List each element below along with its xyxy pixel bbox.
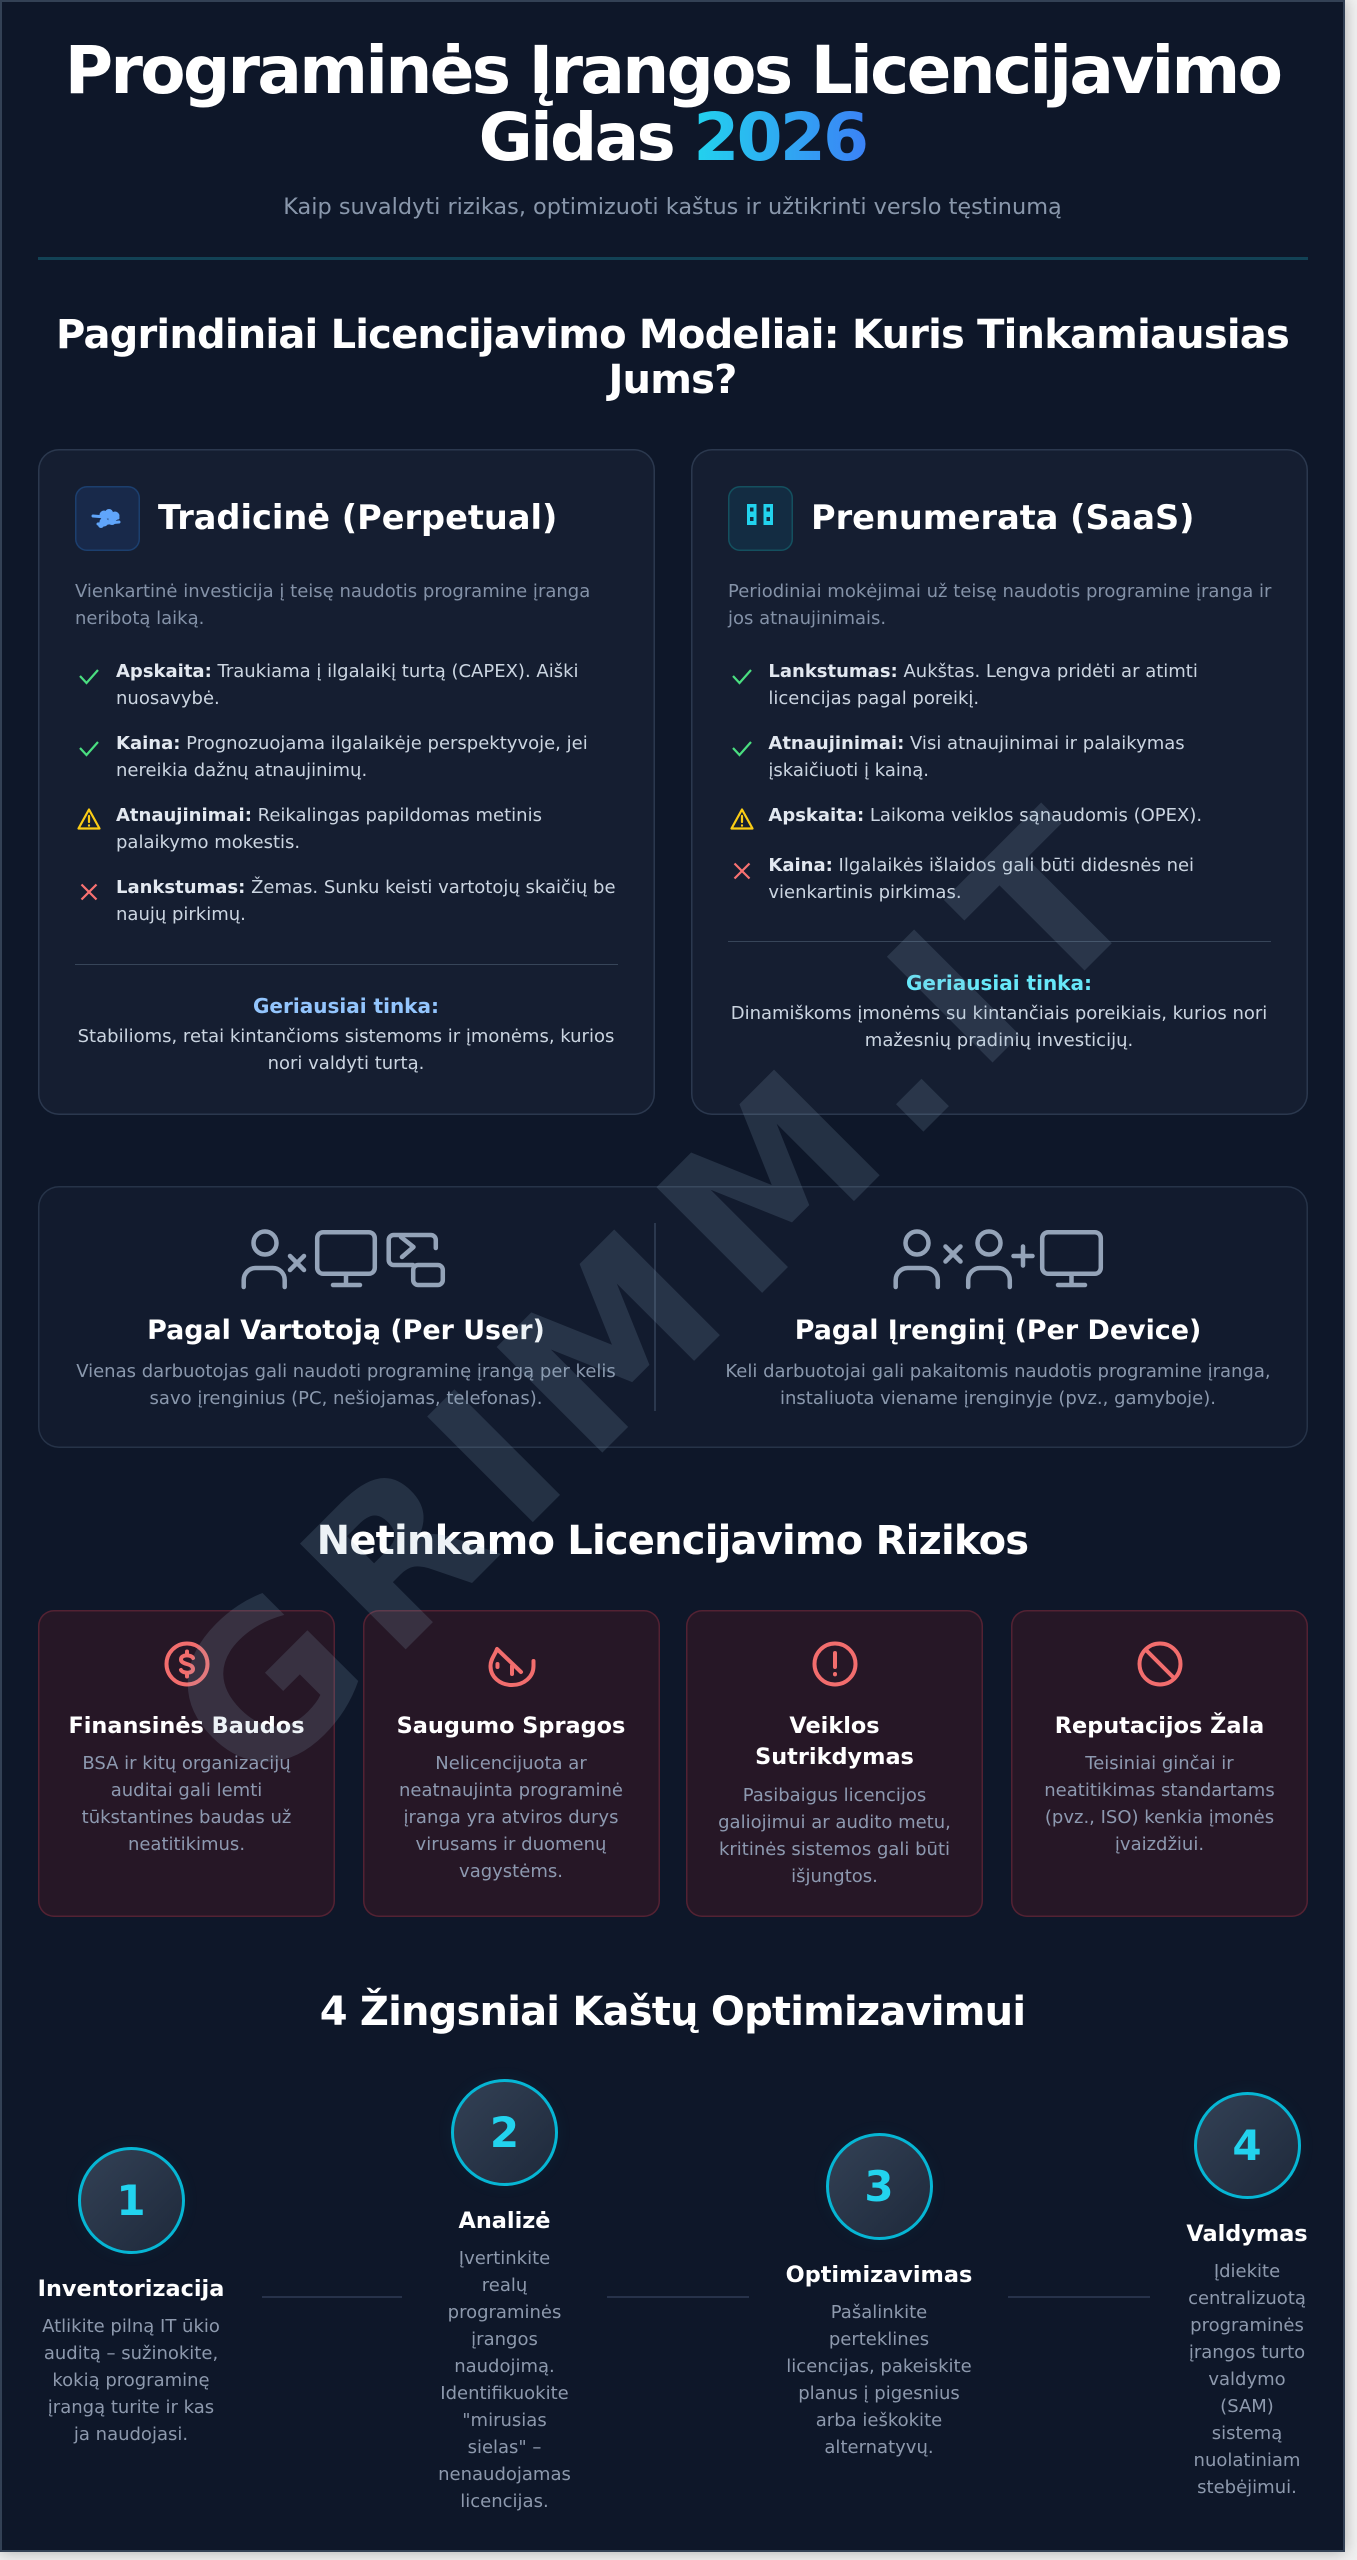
heading: subscription: Prenumerata (SaaS)	[811, 498, 1195, 537]
text: security: virusams ir duomenų	[416, 1834, 606, 1855]
best for label: Geriausiai tinka:	[253, 994, 439, 1018]
text: fines: auditai gali lemti	[111, 1780, 262, 1801]
icon: warning	[730, 808, 754, 830]
step text: stebėjimui.	[1197, 2477, 1297, 2498]
text: per user	[76, 1361, 616, 1409]
list item: accounting: Apskaita: Traukiama į ilgalaikį turtą (CAPEX). Aiški	[116, 661, 578, 682]
list item: renewals: palaikymo mokestis.	[116, 832, 300, 853]
heading: risks: Netinkamo Licencijavimo Rizikos	[317, 1518, 1028, 1564]
text: reputation	[1044, 1753, 1275, 1855]
list item: flexibility	[116, 876, 616, 925]
step text: Pašalinkite	[831, 2302, 927, 2323]
step text: Įvertinkite	[459, 2248, 550, 2269]
description: subscription: jos atnaujinimais.	[728, 608, 886, 629]
icon: perpetual	[75, 486, 140, 551]
step text: sistemą	[1212, 2423, 1282, 2444]
step text: realų	[482, 2275, 527, 2296]
step text: ja naudojasi.	[74, 2424, 188, 2445]
best for text	[731, 1003, 1267, 1051]
description: subscription: Periodiniai mokėjimai už teisę naudotis programine įranga ir	[728, 581, 1271, 602]
text: disruption	[718, 1785, 951, 1887]
step text: įrangos turto	[1189, 2342, 1305, 2363]
icon: cross	[734, 862, 750, 880]
heading: reputation: Reputacijos Žala	[1055, 1713, 1264, 1739]
list item: renewals: Atnaujinimai: Reikalingas papildomas metinis	[116, 805, 542, 826]
step number 2	[451, 2079, 558, 2186]
description: perpetual: Vienkartinė investicija į teisę naudotis programine įranga	[75, 581, 590, 602]
text: fines	[82, 1753, 291, 1855]
step 3	[786, 2133, 972, 2458]
list item: price: Kaina: Prognozuojama ilgalaikėje perspektyvoje, jei	[116, 733, 588, 754]
step text: (SAM)	[1220, 2396, 1274, 2417]
list item: accounting	[116, 661, 578, 709]
icon: check	[79, 741, 99, 756]
description: perpetual	[75, 581, 590, 629]
heading: disruption: Veiklos	[789, 1713, 880, 1739]
list item: flexibility	[768, 661, 1198, 709]
step number 2: 2	[490, 2108, 519, 2157]
list item: renewals	[116, 805, 542, 853]
description: perpetual: neribotą laiką.	[75, 608, 204, 629]
step text: auditą – sužinokite,	[44, 2343, 218, 2364]
description: subscription	[728, 581, 1272, 629]
text: per user: Vienas darbuotojas gali naudoti programinę įrangą per kelis	[76, 1361, 616, 1382]
step title: Analizė	[459, 2208, 550, 2234]
step number 1: 1	[116, 2176, 146, 2225]
step number 3: 3	[864, 2162, 894, 2211]
heading: per user: Pagal Vartotoją (Per User)	[147, 1315, 545, 1346]
text: per device	[725, 1361, 1271, 1409]
list item: price: vienkartinis pirkimas.	[768, 882, 962, 903]
list item: price	[768, 855, 1194, 903]
step 2	[438, 2079, 571, 2512]
text: security: Nelicencijuota ar	[435, 1753, 587, 1774]
best for text	[78, 1026, 614, 1074]
heading: four steps: 4 Žingsniai Kaštų Optimizavimui	[320, 1989, 1025, 2035]
heading: disruption: Sutrikdymas	[755, 1744, 914, 1770]
list item: renewals: Atnaujinimai: Visi atnaujinimai ir palaikymas	[768, 733, 1185, 754]
text: disruption: kritinės sistemos gali būti	[719, 1839, 950, 1860]
list item: flexibility: licencijas pagal poreikį.	[768, 688, 979, 709]
step text	[769, 2299, 989, 2461]
heading: licensing models: Jums?	[608, 357, 737, 403]
panel: per user vs per device	[38, 1186, 1308, 1448]
text: per device: instaliuota viename įrenginyje (pvz., gamyboje).	[780, 1388, 1216, 1409]
step text: Atlikite pilną IT ūkio	[42, 2316, 220, 2337]
heading: security: Saugumo Spragos	[397, 1713, 625, 1739]
step text	[42, 2316, 220, 2445]
icon: check	[732, 669, 752, 684]
panel: perpetual licence	[38, 449, 655, 1115]
list item: renewals: įskaičiuoti į kainą.	[768, 760, 929, 781]
text: reputation: (pvz., ISO) kenkia įmonės	[1045, 1807, 1274, 1828]
text: security: įranga yra atviros durys	[404, 1807, 618, 1828]
heading: per device: Pagal Įrenginį (Per Device)	[795, 1315, 1201, 1346]
heading: licensing models: Pagrindiniai Licencijavimo Modeliai: Kuris Tinkamiausias	[56, 312, 1289, 358]
text: reputation: įvaizdžiui.	[1115, 1834, 1204, 1855]
step title: Valdymas	[1186, 2220, 1308, 2246]
step text: įrangos	[471, 2329, 538, 2350]
step number 4	[1194, 2092, 1300, 2199]
step text: perteklines	[829, 2329, 929, 2350]
step text	[1137, 2258, 1357, 2501]
best for label: Geriausiai tinka:	[906, 971, 1092, 995]
best for text: mažesnių pradinių investicijų.	[865, 1030, 1133, 1051]
icon: prohibited	[1138, 1642, 1182, 1686]
list item: price: nereikia dažnų atnaujinimų.	[116, 760, 367, 781]
step text: kokią programinę	[52, 2370, 210, 2391]
list item: renewals	[768, 733, 1185, 781]
text: disruption: galiojimui ar audito metu,	[718, 1812, 951, 1833]
text: fines: tūkstantines baudas už	[82, 1807, 291, 1828]
step text: centralizuotą	[1188, 2288, 1306, 2309]
text: security	[399, 1753, 623, 1882]
icon: dollar	[164, 1642, 210, 1686]
text: fines: neatitikimus.	[128, 1834, 245, 1855]
step text: planus į pigesnius	[798, 2383, 960, 2404]
step text: programinės	[1190, 2315, 1304, 2336]
text: reputation: Teisiniai ginčai ir	[1085, 1753, 1234, 1774]
icon: user, monitor, devices	[241, 1229, 446, 1290]
best for text: Stabilioms, retai kintančioms sistemoms ir įmonėms, kurios	[78, 1026, 614, 1047]
list item: price: Kaina: Ilgalaikės išlaidos gali būti didesnės nei	[768, 855, 1194, 876]
heading: licensing models	[56, 312, 1289, 403]
step text: alternatyvų.	[824, 2437, 934, 2458]
step title: Inventorizacija	[38, 2276, 224, 2302]
heading: disruption	[755, 1713, 914, 1770]
step text: nuolatiniam	[1194, 2450, 1300, 2471]
title: Gidas 2026	[479, 99, 866, 176]
text: disruption: išjungtos.	[791, 1866, 878, 1887]
text: fines: BSA ir kitų organizacijų	[82, 1753, 291, 1774]
step text: licencijas, pakeiskite	[786, 2356, 972, 2377]
icon: broken drop	[488, 1646, 536, 1687]
icon: check	[79, 669, 99, 684]
step number 3	[826, 2133, 932, 2240]
panel: business disruption	[686, 1610, 983, 1917]
text: disruption: Pasibaigus licencijos	[743, 1785, 926, 1806]
step 1	[38, 2147, 224, 2445]
heading: perpetual: Tradicinė (Perpetual)	[158, 498, 557, 537]
step text: valdymo	[1208, 2369, 1286, 2390]
icon: cross	[80, 884, 98, 900]
panel: reputational damage	[1011, 1610, 1308, 1917]
step text: "mirusias	[462, 2410, 547, 2431]
step text: Identifikuokite	[440, 2383, 569, 2404]
text: per device: Keli darbuotojai gali pakaitomis naudotis programine įranga,	[725, 1361, 1271, 1382]
text: security: neatnaujinta programinė	[399, 1780, 623, 1801]
text: reputation: neatitikimas standartams	[1044, 1780, 1275, 1801]
icon: subscription	[728, 486, 793, 551]
text: per user: savo įrenginius (PC, nešiojamas, telefonas).	[150, 1388, 542, 1409]
step text: įrangą turite ir kas	[48, 2397, 214, 2418]
list item: flexibility: naujų pirkimų.	[116, 904, 246, 925]
title	[65, 32, 1280, 176]
step text: Įdiekite	[1214, 2261, 1280, 2282]
step text: arba ieškokite	[816, 2410, 942, 2431]
best for text: Dinamiškoms įmonėms su kintančiais poreikiais, kurios nori	[731, 1003, 1267, 1024]
icon: users and monitor	[893, 1229, 1104, 1290]
step text: licencijas.	[460, 2491, 549, 2512]
text: security: vagystėms.	[459, 1861, 563, 1882]
panel: financial fines	[38, 1610, 335, 1917]
watermark: GRIMM.IT	[124, 758, 1198, 1832]
list item: flexibility: Lankstumas: Aukštas. Lengva pridėti ar atimti	[768, 661, 1198, 682]
step text: sielas" –	[468, 2437, 541, 2458]
list item: accounting: Apskaita: Laikoma veiklos sąnaudomis (OPEX).	[768, 805, 1202, 826]
step text	[438, 2248, 571, 2512]
icon: exclamation	[812, 1642, 858, 1686]
step text: naudojimą.	[454, 2356, 555, 2377]
best for text: nori valdyti turtą.	[268, 1053, 424, 1074]
icon: check	[732, 741, 752, 756]
step number 1	[78, 2147, 184, 2254]
panel: security gaps	[362, 1610, 660, 1917]
subtitle: Kaip suvaldyti rizikas, optimizuoti kaštus ir užtikrinti verslo tęstinumą	[283, 194, 1062, 220]
list item: flexibility: Lankstumas: Žemas. Sunku keisti vartotojų skaičių be	[116, 877, 616, 898]
heading: fines: Finansinės Baudos	[68, 1713, 305, 1739]
step title: Optimizavimas	[786, 2262, 972, 2288]
step number 4: 4	[1232, 2121, 1262, 2170]
step 4	[1137, 2092, 1357, 2500]
panel: subscription licence	[691, 449, 1308, 1115]
icon: warning	[77, 808, 101, 830]
step text: programinės	[448, 2302, 561, 2323]
title: Programinės Įrangos Licencijavimo	[65, 32, 1280, 109]
step text: nenaudojamas	[438, 2464, 571, 2485]
list item: price	[116, 733, 588, 781]
list item: accounting: nuosavybė.	[116, 688, 220, 709]
